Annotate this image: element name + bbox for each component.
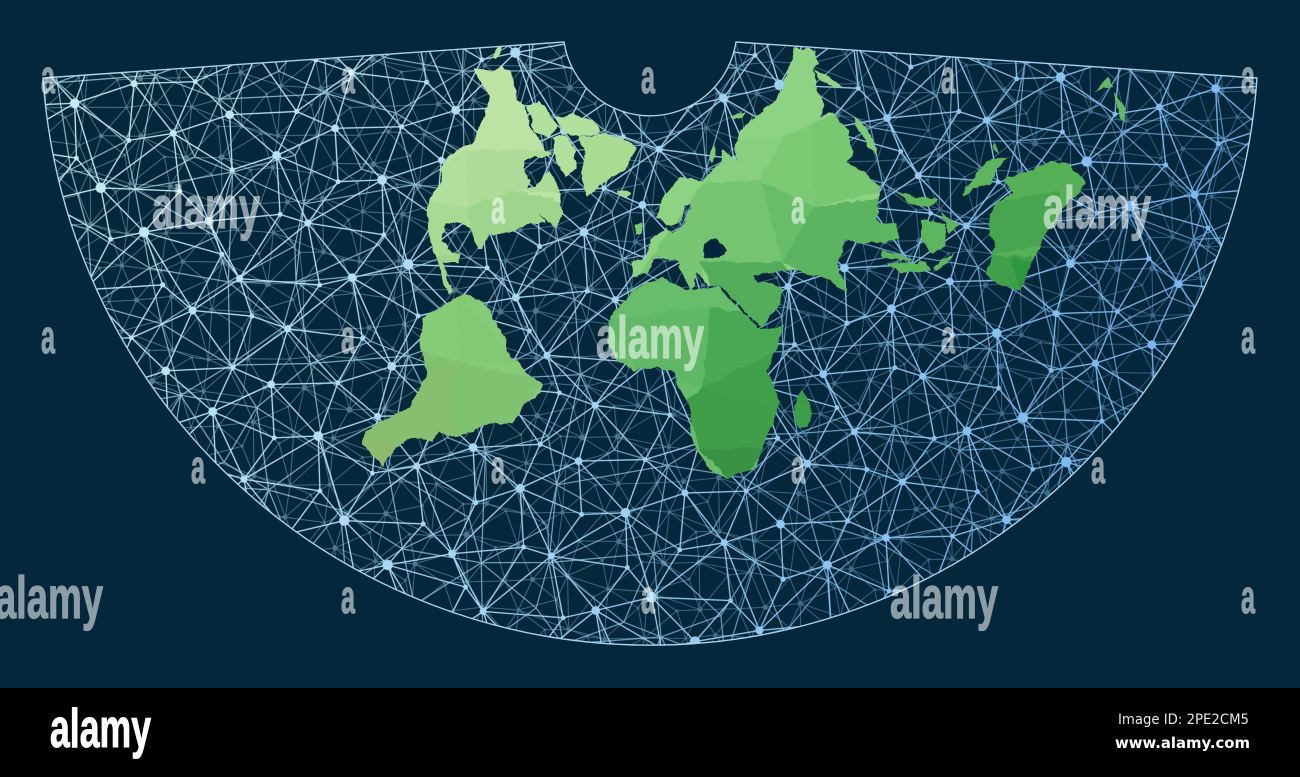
watermark: small a marks: a: [941, 310, 955, 363]
footer bar: [0, 688, 1300, 777]
world map: [42, 41, 1258, 646]
watermark: small a marks: a: [341, 50, 355, 103]
New Zealand: [1095, 77, 1127, 123]
Southeast Asian islands: [879, 142, 1008, 273]
continent: Australia: [986, 161, 1086, 290]
watermark: large alamy logos: alamy: [890, 565, 998, 631]
watermark: small a marks: a: [1241, 310, 1255, 363]
watermark: large alamy logos: alamy: [596, 305, 704, 371]
watermark: small a marks: a: [791, 440, 805, 493]
Black Sea: [703, 238, 727, 258]
Novaya Zemlya: [813, 70, 842, 88]
continents: [355, 40, 1127, 485]
map outline: [43, 42, 1257, 645]
watermark: small a marks: [41, 50, 1255, 623]
arctic islands: [492, 47, 600, 177]
watermark: large alamy logos: alamy: [152, 175, 260, 241]
watermark: small a marks: a: [941, 50, 955, 103]
image id: Image ID: 2PE2CM5: [1118, 712, 1249, 728]
watermark: small a marks: a: [191, 440, 205, 493]
watermark: small a marks: a: [791, 180, 805, 233]
watermark: large alamy logos: alamy: [0, 565, 103, 631]
watermark: small a marks: a: [1241, 570, 1255, 623]
watermark: small a marks: a: [641, 570, 655, 623]
watermark: small a marks: a: [341, 570, 355, 623]
continent: Africa: [607, 276, 784, 479]
watermark: large alamy logos: [0, 175, 1151, 631]
footer logo: alamy: [50, 697, 151, 759]
Greenland: [580, 133, 637, 197]
watermark: small a marks: a: [41, 50, 55, 103]
Madagascar: [793, 390, 812, 427]
east Asian islands: [709, 112, 877, 163]
continent: North America: [426, 65, 563, 294]
continent: Eurasia: [631, 47, 898, 327]
watermark: small a marks: a: [341, 310, 355, 363]
watermark: small a marks: a: [491, 440, 505, 493]
watermark: small a marks: a: [41, 310, 55, 363]
network mesh: [44, 43, 1256, 644]
watermark: large alamy logos: alamy: [1043, 175, 1151, 241]
Iceland: [618, 190, 632, 198]
watermark: small a marks: a: [1241, 50, 1255, 103]
continent: South America: [362, 294, 543, 467]
watermark: small a marks: a: [1091, 440, 1105, 493]
website: www.alamy.com: [1115, 734, 1250, 752]
watermark: small a marks: a: [641, 50, 655, 103]
British Isles: [635, 223, 643, 234]
watermark: small a marks: a: [491, 180, 505, 233]
